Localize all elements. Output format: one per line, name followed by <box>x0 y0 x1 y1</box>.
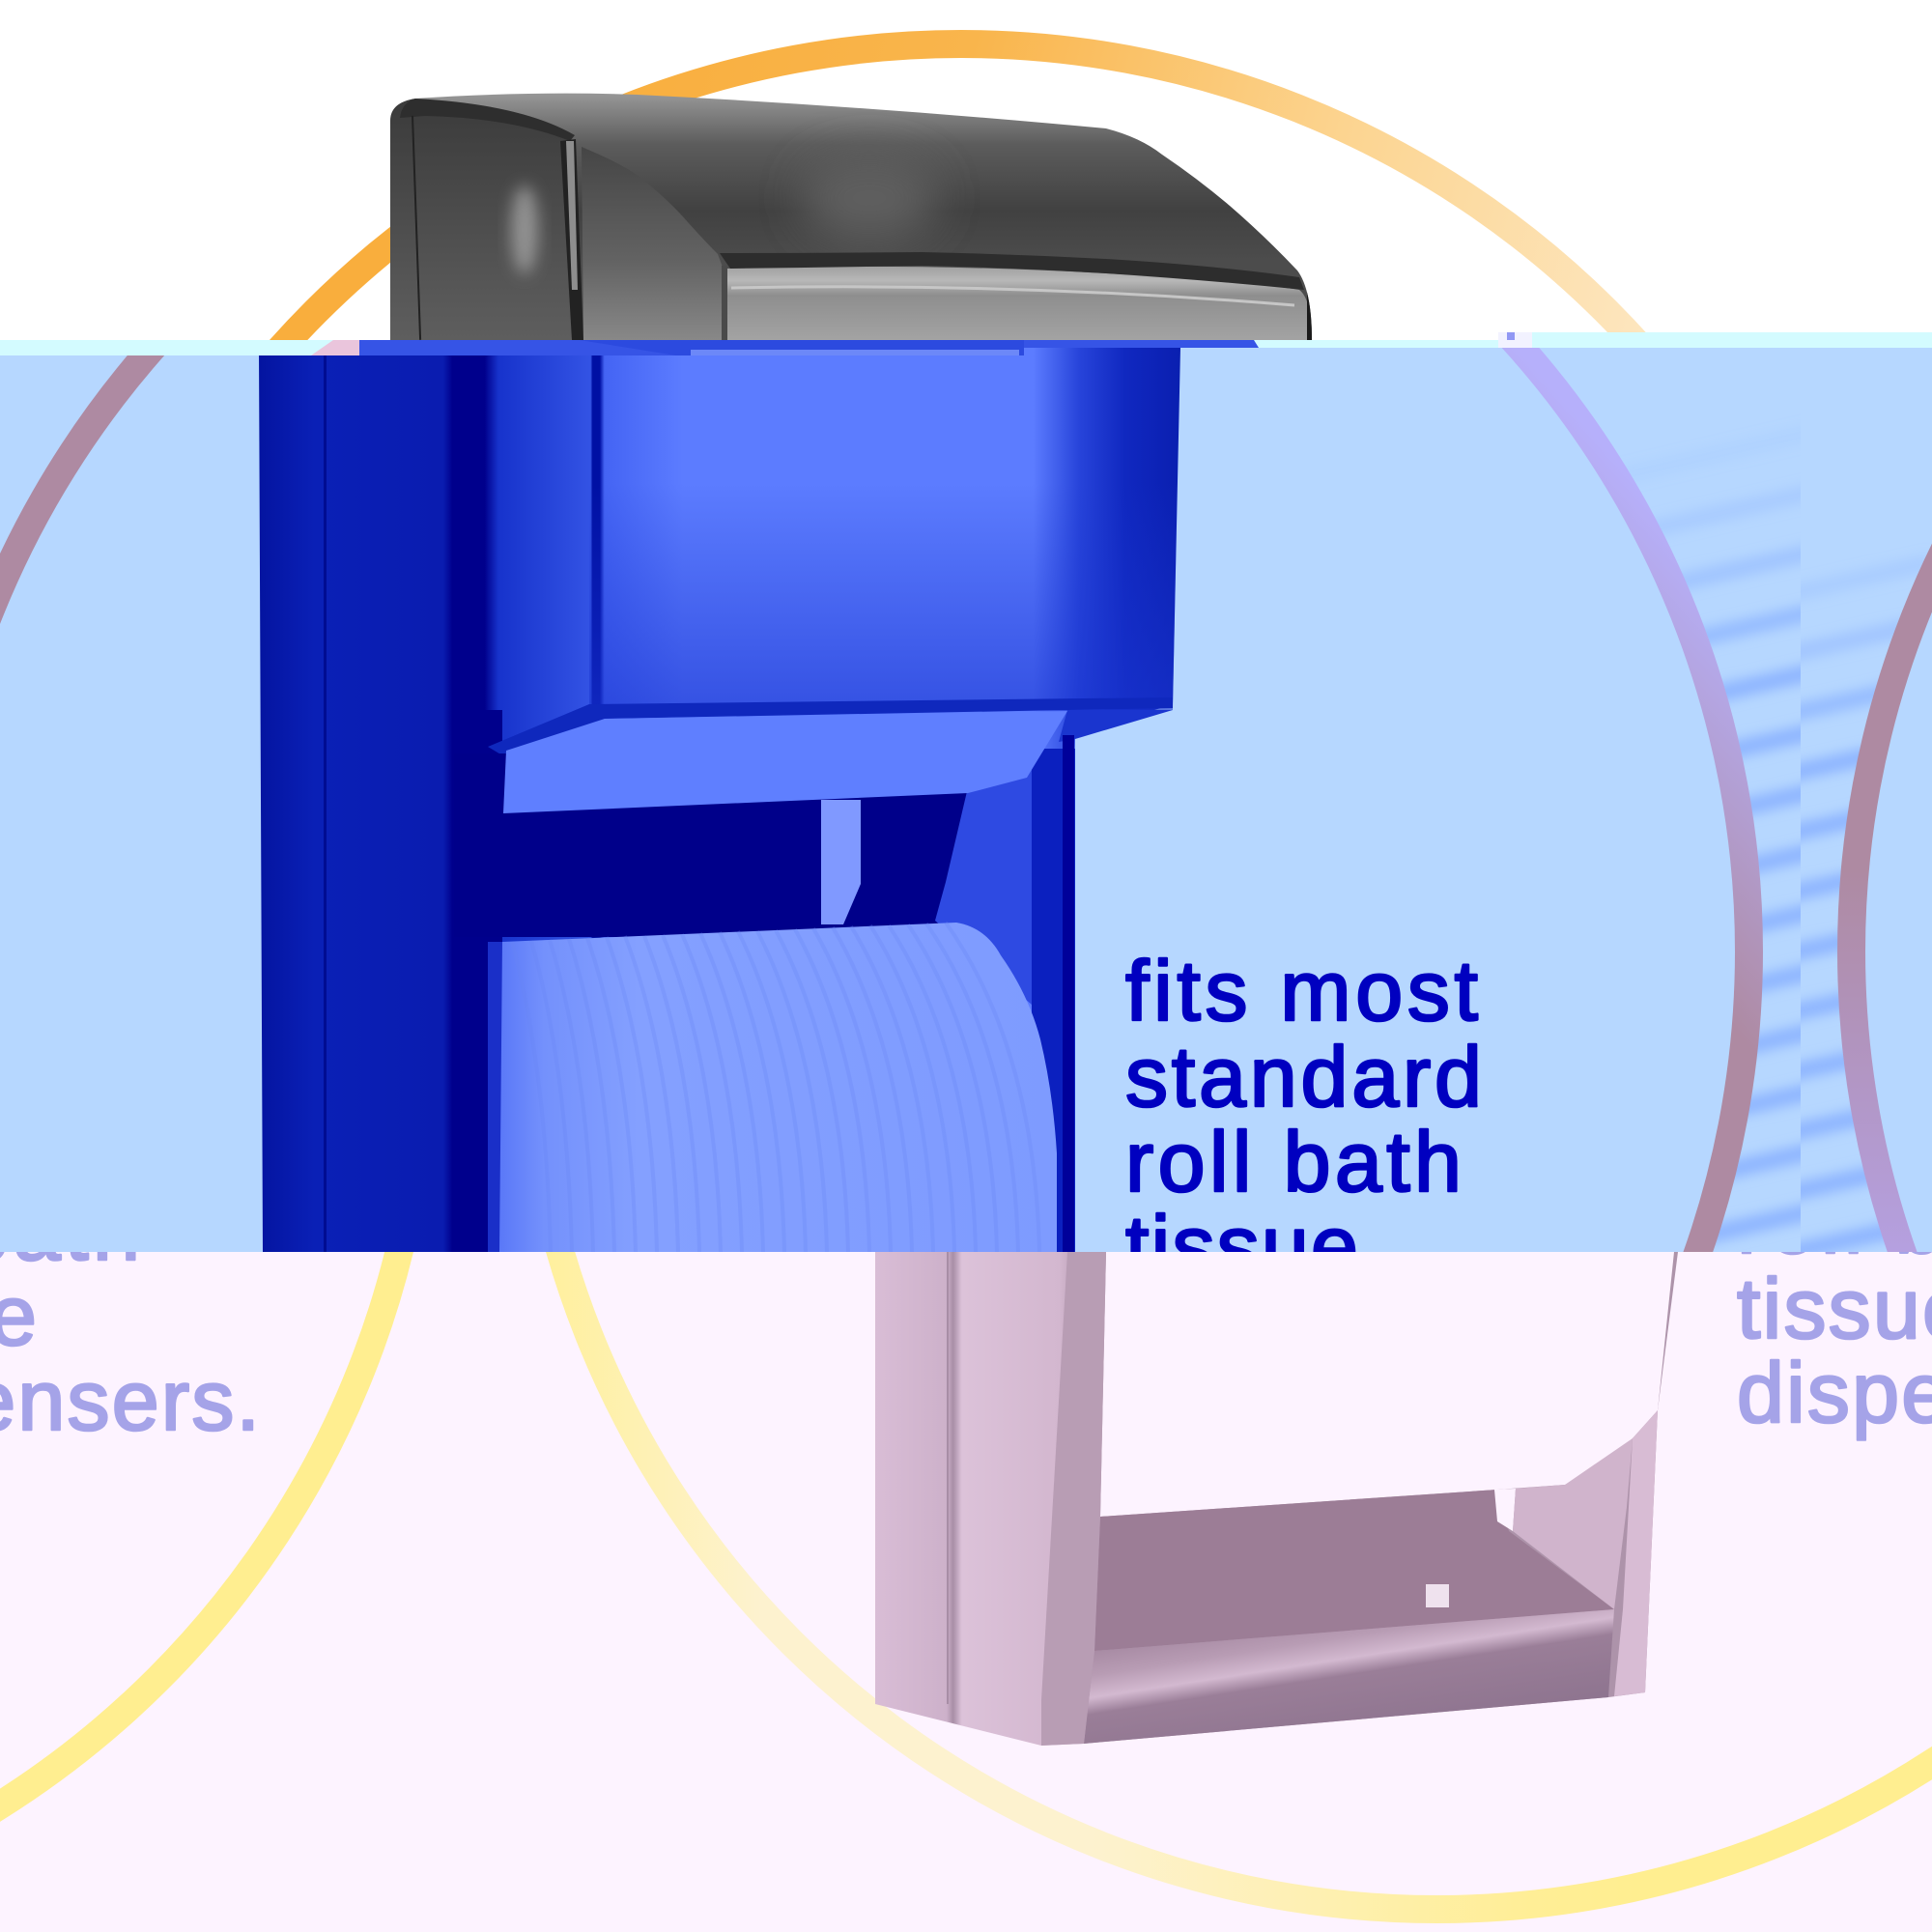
caption: fits most standard roll bath tissue: roll bath <box>1125 1114 1462 1209</box>
caption: fits most standard roll bath tissue: fits most <box>1125 943 1478 1038</box>
caption: fits most standard roll bath tissue: standard <box>1125 1029 1482 1124</box>
paper strip <box>821 800 861 924</box>
hanging paper <box>503 711 1067 813</box>
yellow ring arc left <box>0 1252 413 1822</box>
mauve dispenser bottom <box>875 1252 1678 1746</box>
caption left: bath tissue dispensers <box>0 1252 253 1432</box>
caption right: tissue dispensers <box>1737 1252 1932 1441</box>
yellow ring arc centre <box>546 1252 1932 1923</box>
window <box>1100 1252 1674 1517</box>
panel: top white section <box>270 30 1646 340</box>
orange ring arc <box>270 30 1646 340</box>
dark interior <box>1094 1490 1614 1651</box>
right panel <box>935 762 1032 1005</box>
glitch strip at band top <box>0 332 1932 355</box>
caption: fits most standard roll bath tissue: tissue <box>1125 1198 1358 1293</box>
diagonal stripe texture right <box>1801 558 1924 1252</box>
ring arc left <box>0 348 1763 1252</box>
ring arc right <box>1837 543 1932 1252</box>
blue dispenser body <box>259 348 1180 1256</box>
box lower edge <box>488 697 1173 758</box>
gray dispenser top <box>390 87 1318 348</box>
toilet roll <box>499 923 1057 1252</box>
panel: blue middle band <box>0 348 1932 1252</box>
panel: pale pink bottom section <box>0 1252 1932 1932</box>
side highlight <box>511 185 538 274</box>
dark interior <box>499 753 966 937</box>
dispenser lower lip <box>1084 1609 1614 1744</box>
diagonal stripe texture left <box>1658 488 1801 1247</box>
caption: fits most standard roll bath tissue <box>1124 956 1479 1252</box>
